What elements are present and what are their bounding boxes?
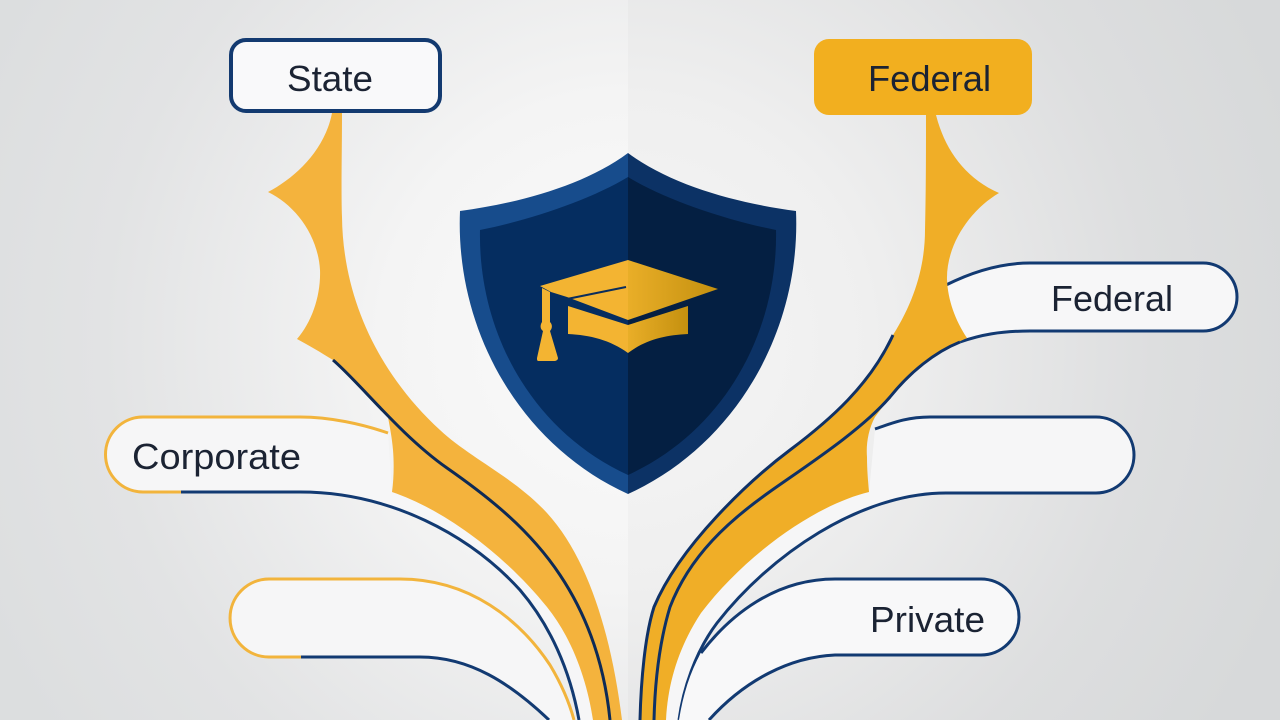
label: Private: Private [870,599,985,640]
label: Federal: Federal [1051,278,1173,319]
label: Corporate: Corporate [132,436,301,477]
panel: blank right pill [666,417,1134,720]
icon: shield [460,153,796,494]
left gold ribbon [268,113,622,720]
label: State: State [287,58,373,99]
label: Federal top: Federal [868,58,991,99]
panel: corporate pill [106,417,593,720]
box: State [231,40,440,111]
panel: federal pill right [930,263,1237,342]
panel: blank lower-left pill [230,579,574,720]
right ribbon navy lines [640,335,960,720]
icon: graduation cap [537,260,718,361]
right gold ribbon [640,115,999,720]
left ribbon navy line [333,360,610,720]
panel: private pill [679,579,1019,720]
box: Federal highlighted [814,39,1032,115]
